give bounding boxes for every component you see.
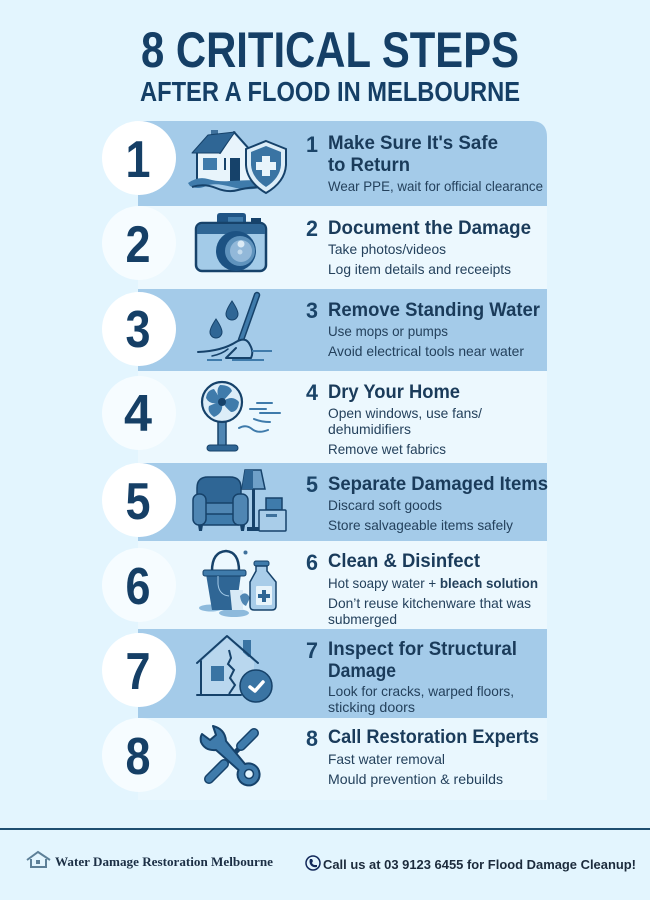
step 3 text: Use mops or pumps [328,323,448,339]
step 6 text: submerged [328,611,397,627]
step 2 text: 2 [306,216,318,241]
icon: cracked house with check [197,636,272,702]
icon: standing fan [202,382,280,451]
number badge 6 [102,548,176,622]
icon: armchair, lamp and boxes [193,470,286,531]
step 5 text: Separate Damaged Items [328,474,548,495]
step 8 text: 8 [306,726,318,751]
step 6 text: Hot soapy water + bleach solution [328,575,538,591]
title [140,22,520,107]
number badge 1: 1 [126,131,150,189]
step 3 text: 3 [306,298,318,323]
step 6 text: 6 [306,550,318,575]
footer: phone call to action: Call us at 03 9123 6455 for Flood Damage Cleanup! [323,857,636,872]
step 8 text: Call Restoration Experts [328,727,539,748]
step 8 text: Mould prevention & rebuilds [328,771,503,787]
step 5 text [306,472,548,533]
title: 8 CRITICAL STEPS [141,22,519,78]
step 4 text: Dry Your Home [328,382,460,403]
step 6 text [306,550,538,627]
number badge 4 [102,376,176,450]
number badge 7: 7 [126,643,150,701]
step 7 text: Damage [328,661,396,682]
step 1 text [306,132,543,194]
step 7 text: Look for cracks, warped floors, [328,683,514,699]
step 4 text [306,380,482,457]
step 5 text: Store salvageable items safely [328,517,513,533]
icon: wrench and screwdriver [201,726,260,785]
number badge 3 [102,292,176,366]
icon: camera [196,213,266,271]
icon: bucket and bleach bottle [199,550,276,617]
step 4 text: dehumidifiers [328,421,411,437]
step 2 text: Log item details and receeipts [328,261,511,277]
number badge 8 [102,718,176,792]
step 2 text: Take photos/videos [328,241,446,257]
step 1 text: 1 [306,132,318,157]
number badge 5 [102,463,176,537]
step 2 text [306,216,531,277]
step 4 text: Open windows, use fans/ [328,405,482,421]
icon: flooded house with shield [188,130,286,193]
step 1 text: Wear PPE, wait for official clearance [328,178,543,194]
step 6 text: Clean & Disinfect [328,551,481,572]
step 7 text [306,638,517,715]
panel: step 3 band [138,289,547,371]
footer: company logo and name: Water Damage Restoration Melbourne [55,854,273,869]
step 7 text: sticking doors [328,699,415,715]
step 3 text: Avoid electrical tools near water [328,343,524,359]
step 8 text: Fast water removal [328,751,445,767]
step 7 text: Inspect for Structural [328,639,517,660]
number badge 7 [102,633,176,707]
step 8 text [306,726,539,787]
step 6 text: Don’t reuse kitchenware that was [328,595,531,611]
number badge 4: 4 [124,385,152,443]
step 1 text: to Return [328,155,410,176]
number badge 8: 8 [126,728,150,786]
step 5 text: 5 [306,472,318,497]
step 1 text: Make Sure It's Safe [328,133,498,154]
step 5 text: Discard soft goods [328,497,442,513]
number badge 2: 2 [126,216,150,274]
panel: step 7 band [138,629,547,718]
icon: mop and water drops [198,295,272,360]
step 7 text: 7 [306,638,318,663]
number badge 1 [102,121,176,195]
step 2 text: Document the Damage [328,218,531,239]
step 4 text: 4 [306,380,319,405]
step 3 text: Remove Standing Water [328,300,541,321]
number badge 3: 3 [126,301,150,359]
number badge 5: 5 [126,473,150,531]
step 4 text: Remove wet fabrics [328,441,446,457]
panel: step 5 band [138,463,547,541]
panel: step 1 band [138,121,547,206]
number badge 6: 6 [126,558,150,616]
title: AFTER A FLOOD IN MELBOURNE [140,76,520,107]
step 3 text [306,298,541,359]
number badge 2 [102,206,176,280]
